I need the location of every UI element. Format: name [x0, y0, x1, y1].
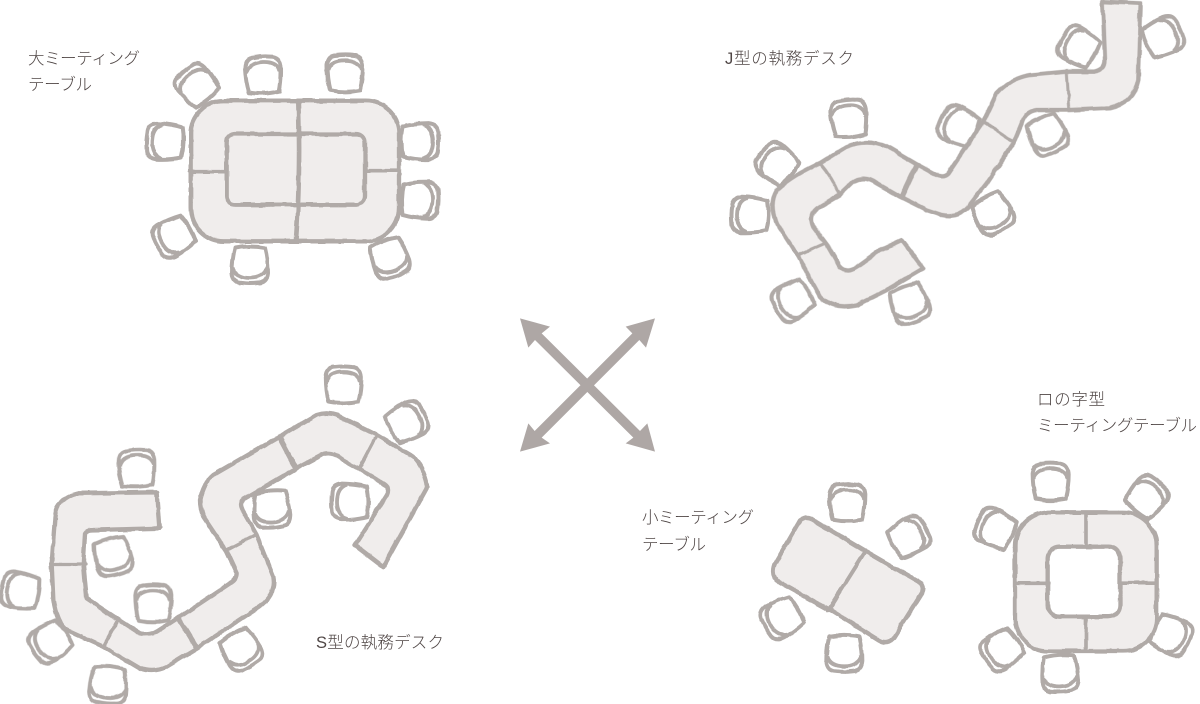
desk surface: S-shaped desk — [52, 413, 427, 670]
label: square meeting table — [1037, 390, 1197, 435]
label: large meeting table: 大ミーティング — [28, 49, 140, 68]
large meeting table with chairs — [146, 55, 439, 283]
label: large meeting table: テーブル — [28, 75, 92, 94]
chairs: J-shaped desk — [731, 13, 1188, 328]
table surface: square meeting table — [1015, 512, 1157, 651]
small meeting table and square meeting table with chairs — [757, 463, 1196, 693]
label: small meeting table — [642, 508, 754, 554]
table surface: large meeting table — [190, 101, 399, 241]
table surface: small meeting table — [773, 517, 923, 642]
chairs: S-shaped desk — [0, 366, 432, 704]
label: large meeting table — [28, 49, 140, 94]
label: J-shaped desk: J型の執務デスク — [725, 49, 854, 68]
S-shaped executive desk with chairs — [0, 366, 432, 704]
chairs: large meeting table — [146, 55, 439, 283]
chairs: square meeting table — [971, 463, 1196, 693]
chairs: small meeting table — [757, 484, 934, 672]
desk surface: J-shaped desk — [772, 2, 1141, 306]
four-way cross arrows — [520, 318, 655, 452]
label: square meeting table: ミーティングテーブル — [1037, 416, 1197, 435]
label: small meeting table: 小ミーティング — [642, 508, 754, 527]
label: square meeting table: ロの字型 — [1037, 390, 1105, 409]
label: small meeting table: テーブル — [642, 535, 706, 554]
J-shaped executive desk with chairs — [731, 2, 1188, 328]
label: S-shaped desk: S型の執務デスク — [316, 633, 444, 652]
